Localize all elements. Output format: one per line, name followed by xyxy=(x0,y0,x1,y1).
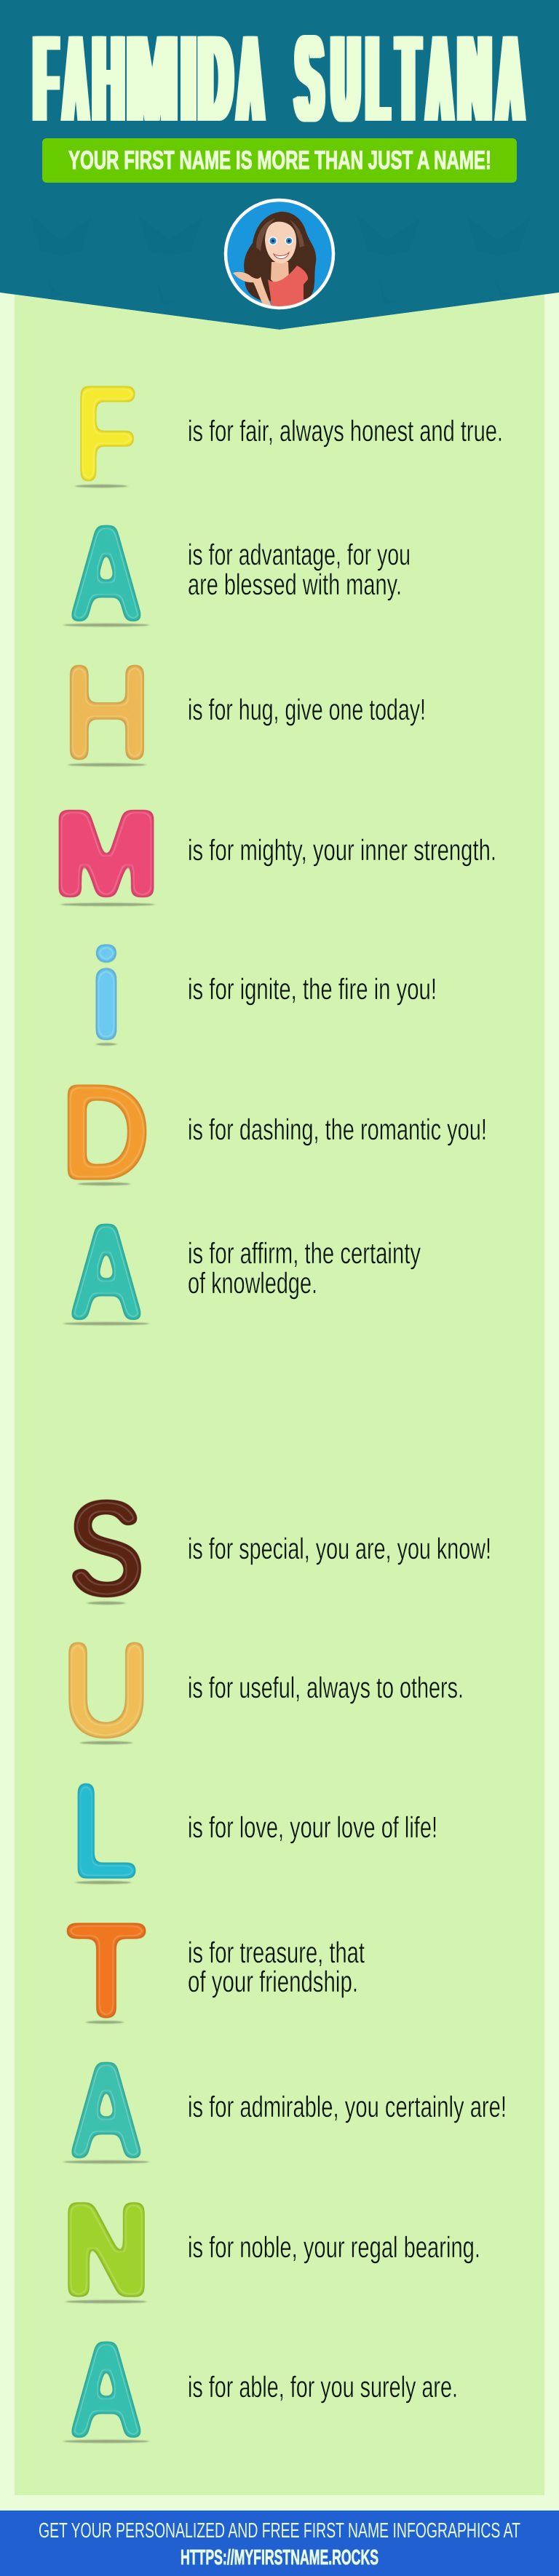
row: A (able) xyxy=(63,2315,458,2465)
title: L xyxy=(368,9,387,147)
text: hug: is for hug, give one today! xyxy=(188,693,426,726)
text: treasure: is for treasure, that xyxy=(188,1936,365,1969)
title xyxy=(32,9,526,147)
letter M: M xyxy=(54,787,159,920)
title: D xyxy=(199,9,231,147)
letter i: i xyxy=(90,924,123,1065)
text: knowledge: of knowledge. xyxy=(188,1266,317,1300)
title: F xyxy=(35,9,57,147)
avatar: woman in blue circle xyxy=(226,200,333,309)
title: A xyxy=(64,9,87,147)
title: T xyxy=(397,9,419,147)
letter U shadow xyxy=(80,1741,132,1744)
letter N: N xyxy=(63,2179,149,2321)
title: A xyxy=(238,9,262,147)
letter S shadow xyxy=(87,1602,125,1605)
letter H shadow xyxy=(68,763,146,766)
text: love: is for love, your love of life! xyxy=(188,1810,437,1844)
footer background xyxy=(0,2511,559,2576)
letter L: L xyxy=(71,1754,139,1907)
green bar xyxy=(42,138,517,183)
title: N xyxy=(458,9,491,147)
footer bar xyxy=(0,2511,559,2576)
row: M xyxy=(54,787,496,920)
letter A shadow xyxy=(63,1322,149,1325)
row: S xyxy=(67,1472,491,1626)
title: A xyxy=(427,9,451,147)
text: blessed: are blessed with many. xyxy=(188,568,402,601)
row: T xyxy=(65,1893,365,2047)
letter F shadow xyxy=(75,485,127,488)
letter A: A xyxy=(68,2035,144,2186)
footer line 2: HTTPS://MYFIRSTNAME.ROCKS xyxy=(181,2546,378,2569)
letter M shadow xyxy=(60,903,155,906)
text: advantage: is for advantage, for you xyxy=(188,538,411,571)
letter D shadow xyxy=(78,1182,130,1185)
text: affirm: is for affirm, the certainty xyxy=(188,1236,421,1270)
letter D: D xyxy=(60,1055,151,1209)
title: S xyxy=(296,9,322,147)
letter H: H xyxy=(62,636,152,790)
row: I xyxy=(90,924,437,1065)
row: A (affirm) xyxy=(63,1197,421,1348)
letter N shadow xyxy=(66,2300,147,2303)
letter i shadow xyxy=(96,1043,116,1046)
row: A (advantage) xyxy=(63,498,411,649)
header background: teal chevron banner xyxy=(0,0,559,330)
letter T: T xyxy=(65,1893,148,2047)
title: I xyxy=(173,9,204,147)
row: H xyxy=(62,636,426,790)
letter A shadow xyxy=(63,624,149,627)
title: A xyxy=(498,9,523,147)
title: U xyxy=(333,9,359,147)
text: ignite: is for ignite, the fire in you! xyxy=(188,972,437,1006)
letter S: S xyxy=(67,1472,146,1626)
letter A: A xyxy=(68,498,144,649)
letter A: A xyxy=(68,2315,144,2465)
row: D xyxy=(60,1055,487,1209)
faint butterfly pattern in the header xyxy=(31,215,530,304)
row: A (admirable) xyxy=(63,2035,507,2186)
letter A shadow xyxy=(63,2160,149,2163)
row: N xyxy=(63,2179,480,2321)
letter A shadow xyxy=(63,2440,149,2443)
title: H xyxy=(93,9,123,147)
subtitle banner xyxy=(42,138,517,183)
letter T shadow xyxy=(86,2021,124,2024)
row: F xyxy=(74,357,503,510)
letter U: U xyxy=(62,1613,151,1767)
row: L xyxy=(71,1754,437,1907)
text: friendship: of your friendship. xyxy=(188,1965,358,1998)
letter L shadow xyxy=(76,1881,131,1884)
letter F: F xyxy=(74,357,139,510)
row: U xyxy=(62,1613,464,1767)
title: M xyxy=(127,9,177,147)
letter A: A xyxy=(68,1197,144,1348)
